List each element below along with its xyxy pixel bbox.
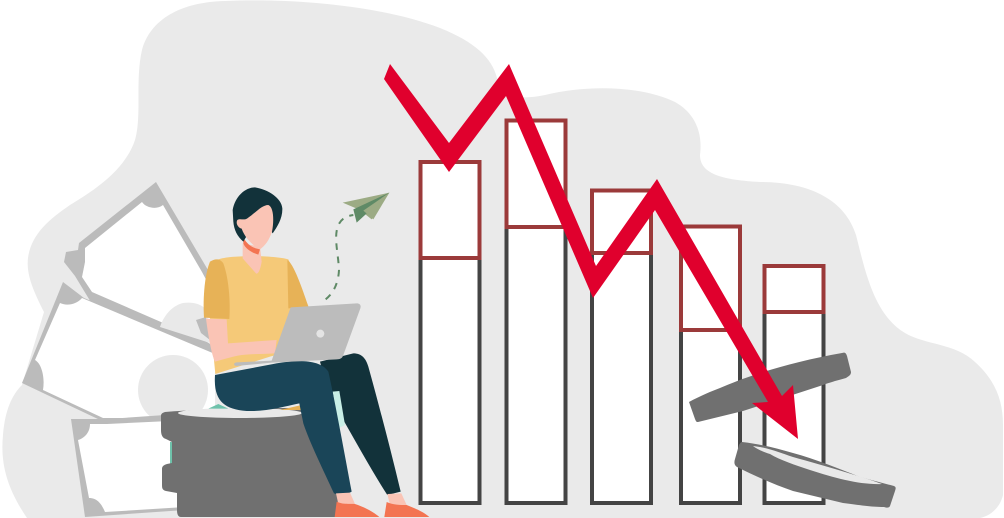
right foot (387, 493, 407, 505)
person (204, 187, 429, 517)
under thigh yellow (280, 405, 302, 410)
right sleeve (287, 260, 308, 308)
dashed flight path (326, 215, 353, 299)
falling coin upper (689, 353, 851, 422)
coin stack (161, 408, 345, 517)
bar chart (420, 120, 824, 503)
face (237, 205, 273, 249)
arm (206, 319, 277, 362)
bar 3 (592, 190, 651, 503)
note top medallion (160, 303, 210, 343)
red falling arrow (384, 64, 798, 439)
right shoe (384, 502, 429, 517)
torso shirt (210, 256, 308, 374)
paper plane (343, 193, 389, 223)
lower coin highlight (753, 446, 882, 484)
note: bottom (71, 415, 185, 517)
hair (233, 187, 282, 242)
bar 5 (764, 266, 824, 503)
sliver between legs (333, 391, 345, 428)
under thigh accents (208, 404, 228, 409)
left sleeve (204, 259, 230, 319)
front leg (215, 361, 352, 494)
collar shadow (243, 237, 260, 255)
coin top highlight (178, 408, 302, 418)
left shoe (335, 502, 379, 517)
left foot (336, 493, 355, 504)
back leg (320, 353, 401, 495)
money notes (22, 182, 215, 517)
bar 2 (506, 120, 566, 503)
bar 1 (420, 162, 480, 503)
note: middle (22, 282, 215, 425)
neck (243, 243, 262, 274)
note middle medallion (138, 355, 208, 425)
falling coin lower (734, 442, 896, 508)
laptop (234, 303, 361, 366)
bar 4 (681, 226, 740, 503)
note: top (64, 182, 215, 352)
